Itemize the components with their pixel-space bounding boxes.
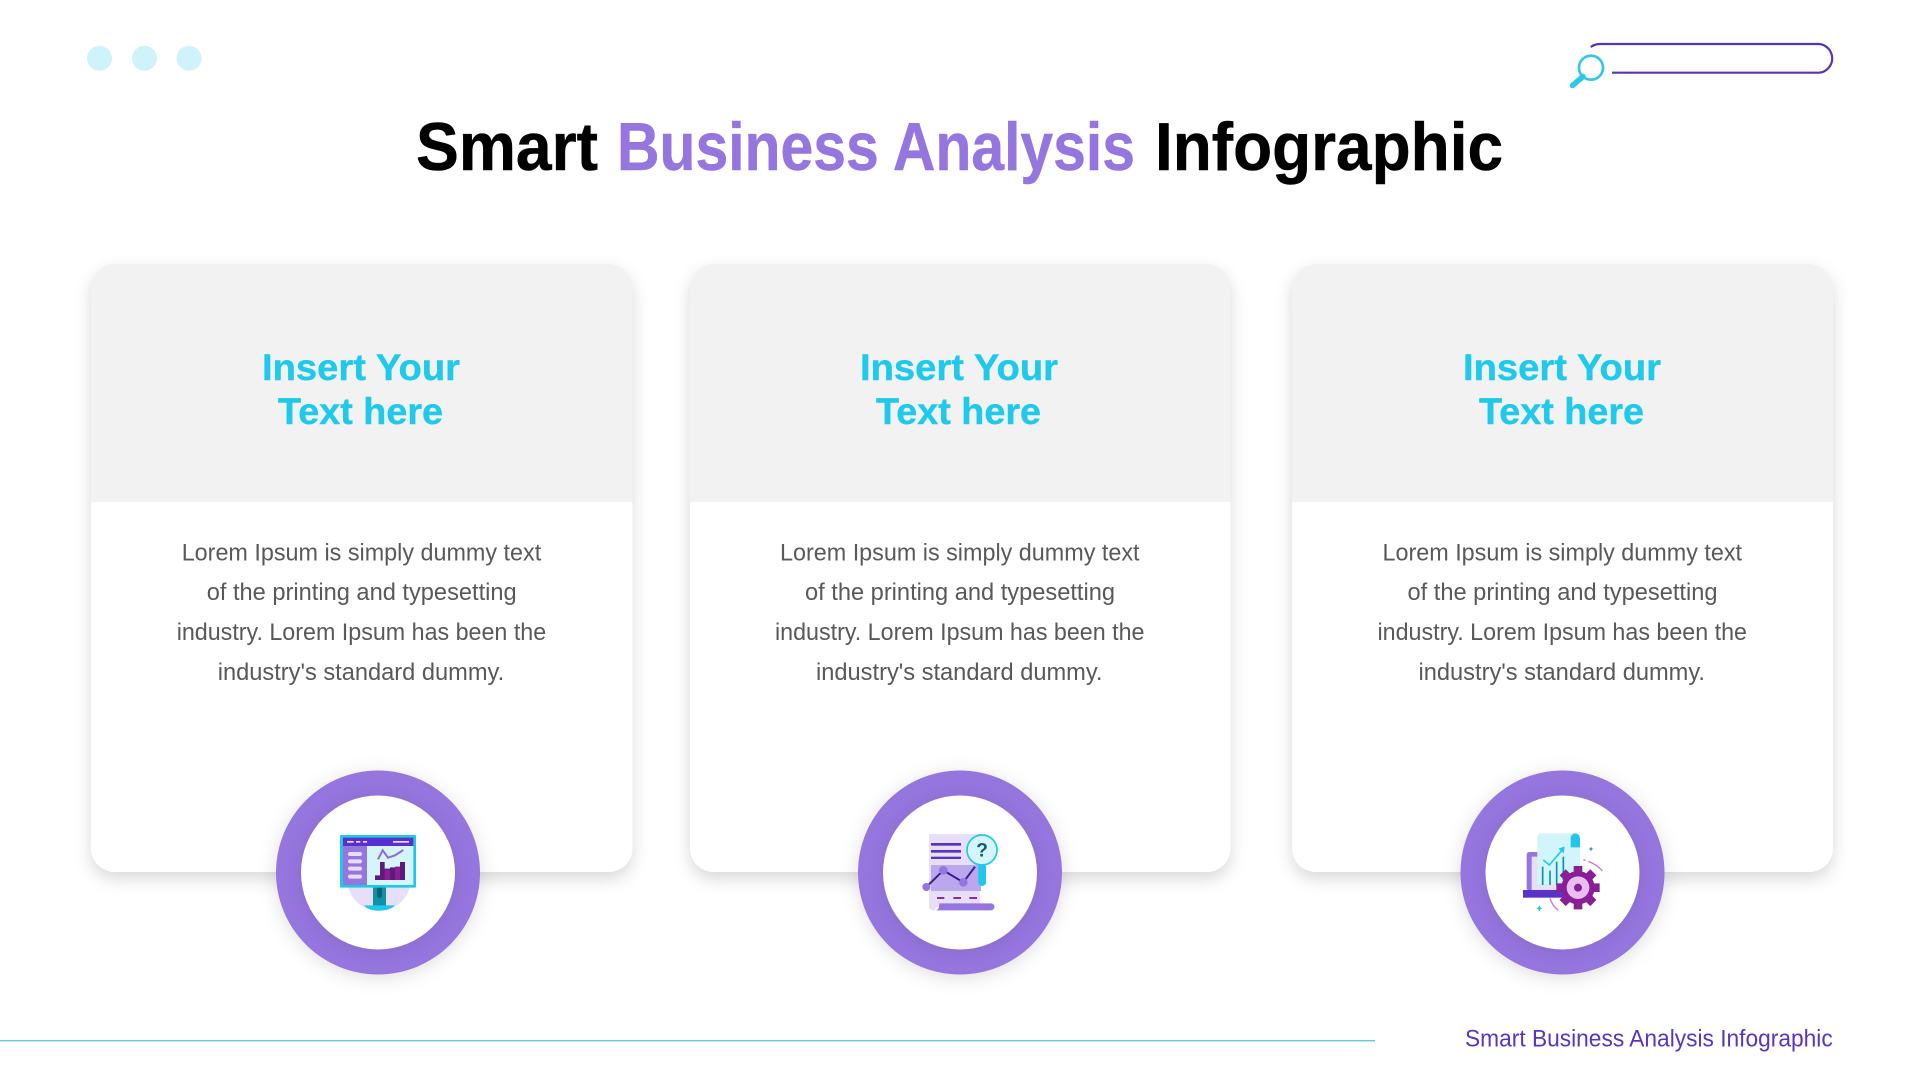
card 2 body text: of the printing and typesetting [805, 579, 1115, 606]
card 2 heading: Insert Your [860, 347, 1058, 388]
card 3 body text: industry's standard dummy. [1418, 659, 1705, 686]
card 3 body text: industry. Lorem Ipsum has been the [1378, 619, 1747, 646]
title: Business Analysis [617, 109, 1135, 185]
card 3 body text: Lorem Ipsum is simply dummy text [1382, 540, 1742, 567]
card 3 heading: Text here [1479, 391, 1644, 432]
card 1 body text: Lorem Ipsum is simply dummy text [182, 540, 542, 567]
icon: document with magnifier: ? [976, 841, 988, 862]
icon: monitor with charts [340, 835, 416, 911]
card 2 heading: Text here [876, 391, 1041, 432]
card 1 body text: of the printing and typesetting [207, 579, 517, 606]
card 2 body text: industry. Lorem Ipsum has been the [775, 619, 1144, 646]
card 3 heading [1463, 347, 1661, 432]
card 1 heading: Insert Your [262, 347, 460, 388]
panel: card 3 [1292, 264, 1833, 872]
panel: card 1 [91, 264, 632, 872]
panel: card 2 [690, 264, 1230, 872]
card 1 body text: industry's standard dummy. [218, 659, 504, 686]
search bar icon [1572, 44, 1832, 86]
title: Smart [416, 109, 598, 185]
card 1 body text: industry. Lorem Ipsum has been the [177, 619, 546, 646]
title [416, 109, 1503, 185]
badge ring 1 [276, 770, 480, 974]
badge ring 2 [858, 770, 1062, 974]
footer rule [0, 1040, 1375, 1041]
icon: document with magnifier [922, 834, 997, 910]
card 2 body text [775, 540, 1144, 686]
card 1 heading: Text here [278, 391, 443, 432]
card 3 heading: Insert Your [1463, 347, 1661, 388]
footer text: Smart Business Analysis Infographic [1465, 1026, 1833, 1053]
card 2 heading [860, 347, 1058, 432]
icon: laptop with gear [1523, 833, 1602, 911]
card 2 body text: Lorem Ipsum is simply dummy text [780, 540, 1140, 567]
card 2 body text: industry's standard dummy. [816, 659, 1102, 686]
card 3 body text [1378, 540, 1747, 686]
card 3 body text: of the printing and typesetting [1408, 579, 1718, 606]
card 1 body text [177, 540, 546, 686]
badge ring 3 [1460, 770, 1664, 974]
card 1 heading [262, 347, 460, 432]
decorative window dots [87, 46, 202, 71]
title: Infographic [1155, 109, 1503, 185]
